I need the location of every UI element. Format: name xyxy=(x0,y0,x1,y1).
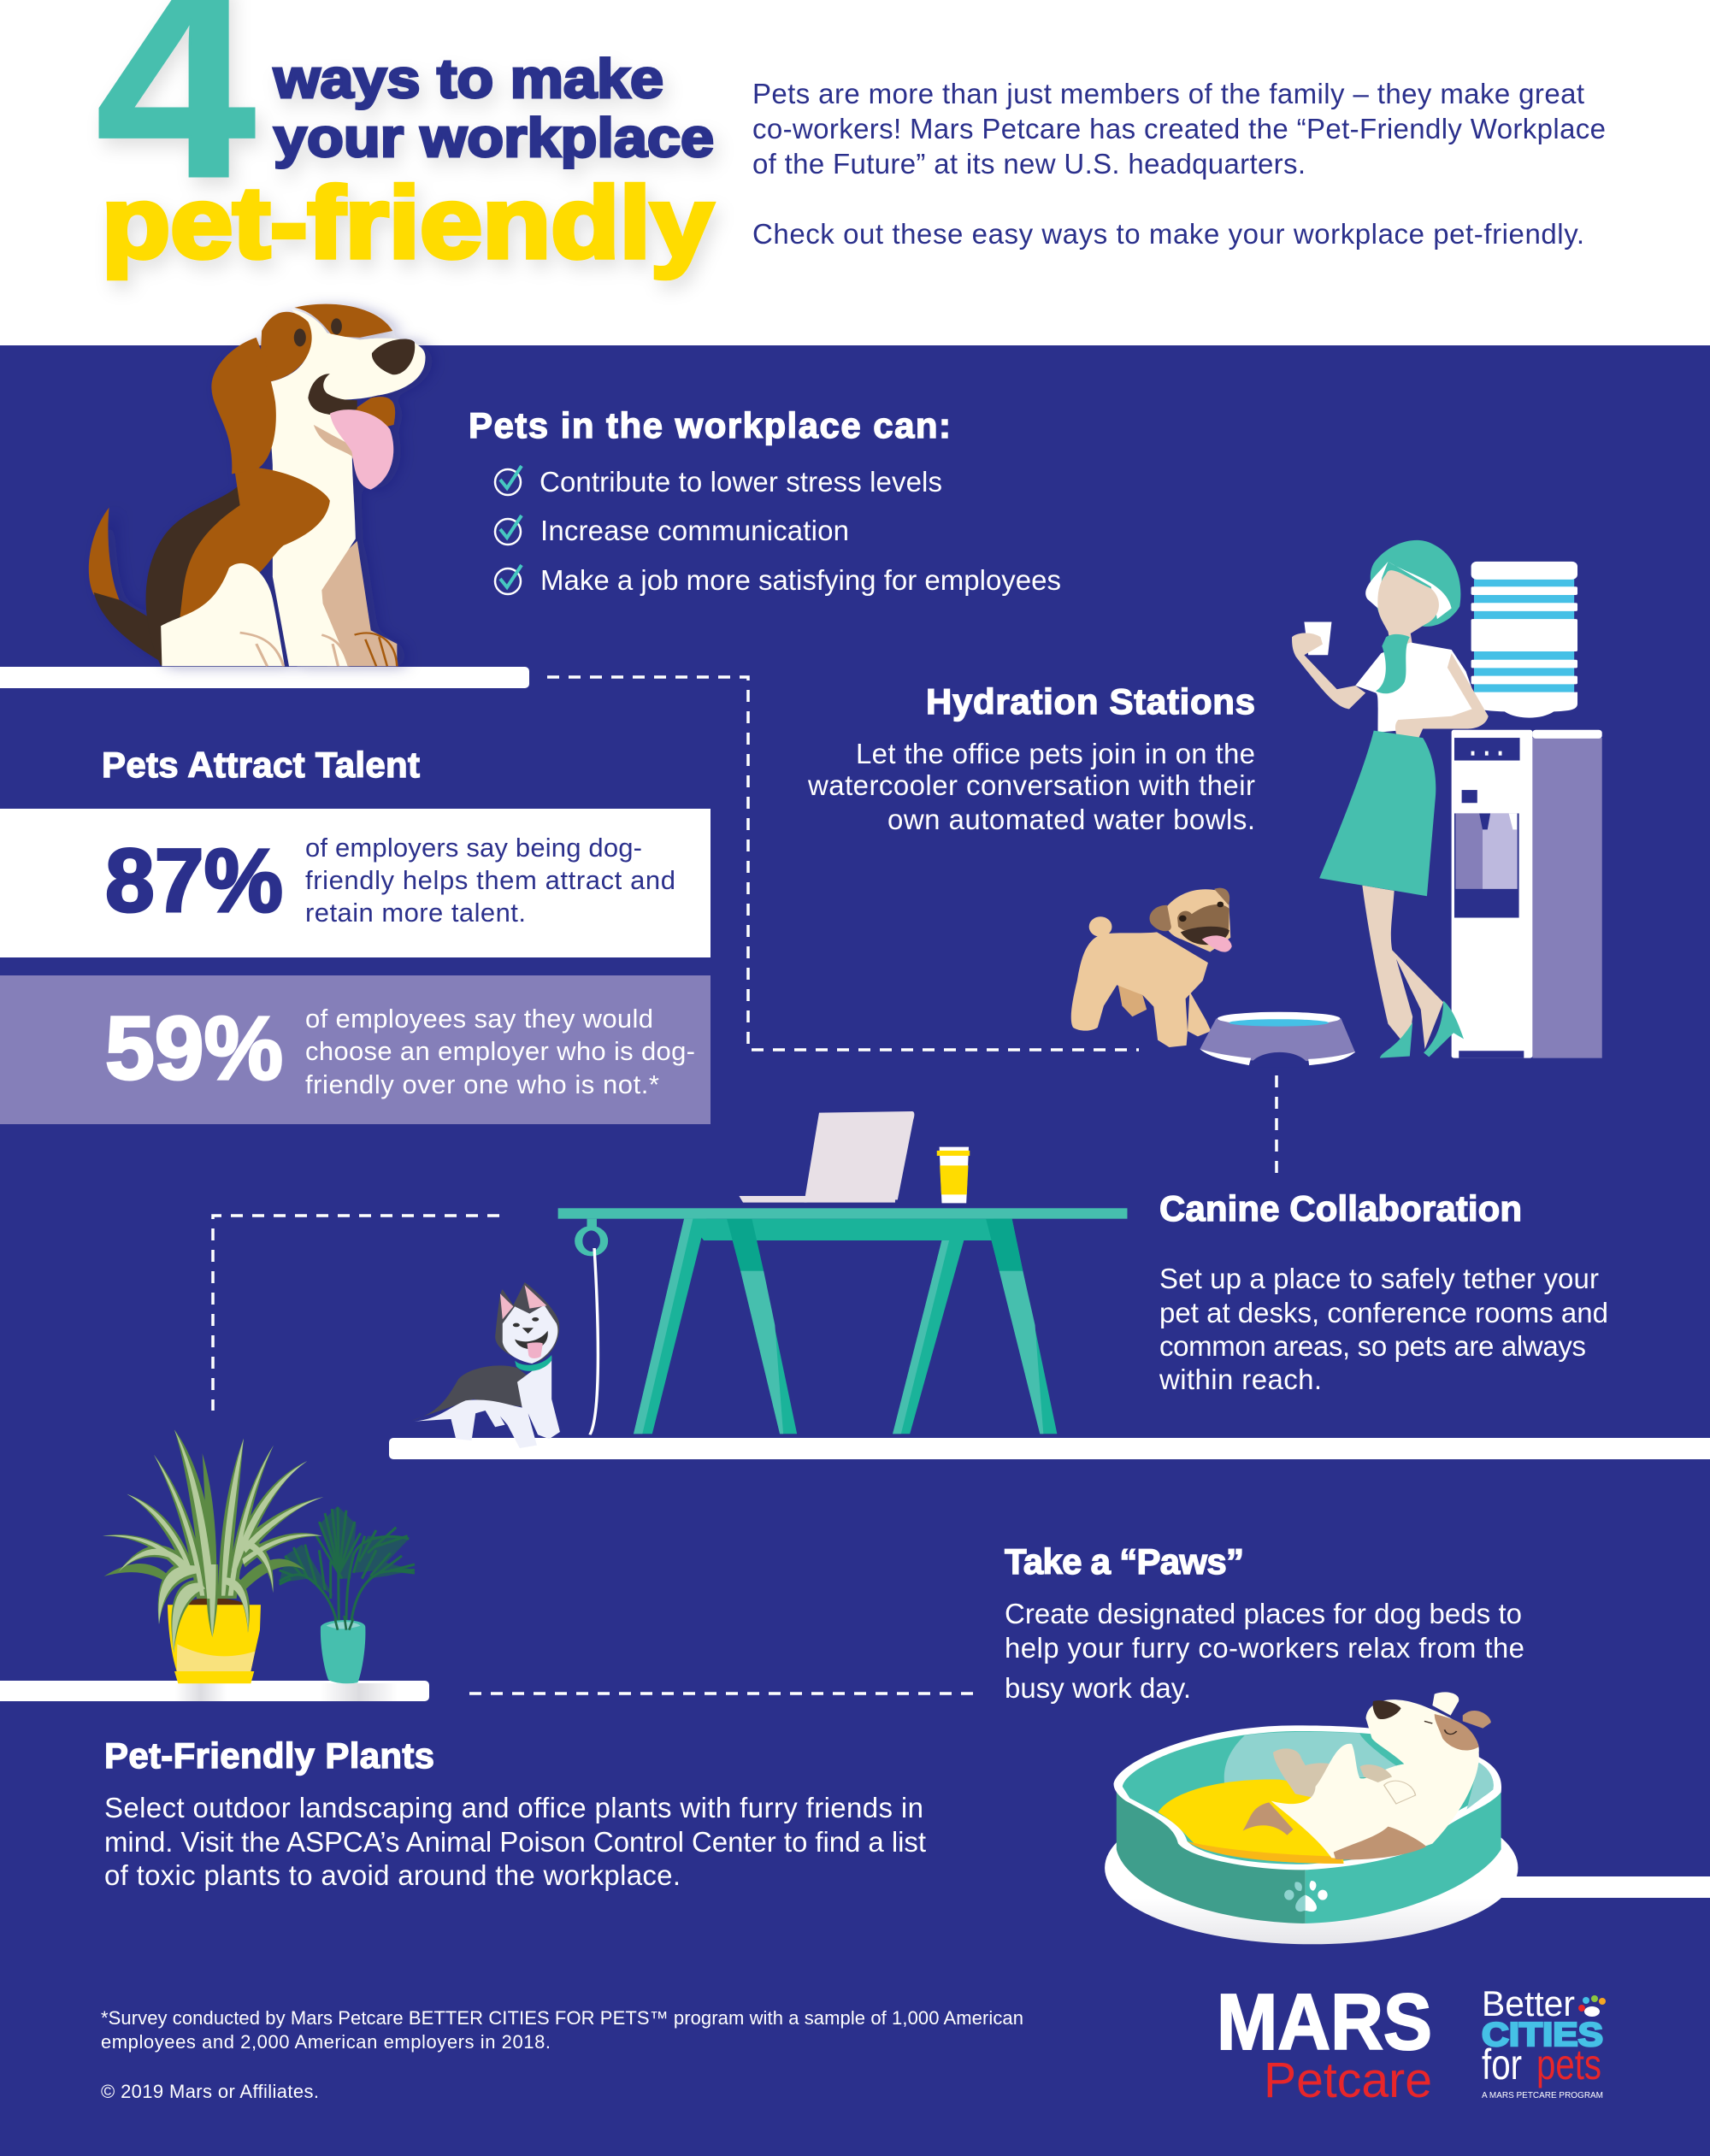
section: take a paws xyxy=(1005,1541,1524,1704)
stat card: 59%: of employees say they would xyxy=(305,1004,653,1034)
illustration: palm in teal vase xyxy=(280,1506,415,1683)
section: take a paws: busy work day. xyxy=(1005,1672,1191,1704)
logo: Better Cities for Pets: pets xyxy=(1536,2041,1601,2088)
leaves inner xyxy=(103,1429,323,1652)
section: canine collaboration: Set up a place to safely tether your xyxy=(1159,1263,1599,1294)
logo: Better Cities for Pets: Better xyxy=(1482,1983,1575,2023)
icon: colored paw xyxy=(1578,1995,1606,2017)
section: pet-friendly plants: of toxic plants to avoid around the workplace. xyxy=(104,1859,681,1891)
section: pet-friendly plants: Pet-Friendly Plants xyxy=(104,1735,434,1776)
stat card: 59%: choose an employer who is dog- xyxy=(305,1036,695,1066)
logo: Mars Petcare xyxy=(1217,1977,1432,2108)
section: canine collaboration: pet at desks, conference rooms and xyxy=(1159,1297,1608,1328)
section: canine collaboration xyxy=(1159,1188,1608,1395)
shelf: plants xyxy=(0,1681,429,1701)
title: pet-friendly xyxy=(102,167,713,280)
logo: Better Cities for Pets: CITIES xyxy=(1482,2017,1603,2053)
section: pet-friendly plants: mind. Visit the ASPCA’s Animal Poison Control Center to find a list xyxy=(104,1826,926,1858)
checklist xyxy=(495,466,1061,596)
section: canine collaboration: common areas, so pets are always xyxy=(1159,1330,1586,1362)
stat card: 87%: retain more talent. xyxy=(305,898,526,928)
stat card: 59%: friendly over one who is not.* xyxy=(305,1069,659,1099)
footnote: employees and 2,000 American employers in 2018. xyxy=(101,2031,551,2053)
logo: Better Cities for Pets: A MARS PETCARE PROGRAM xyxy=(1482,2090,1603,2100)
section: hydration stations: Let the office pets join in on the xyxy=(856,738,1255,769)
intro text: co-workers! Mars Petcare has created the “Pet-Friendly Workplace xyxy=(752,113,1606,144)
footnote: © 2019 Mars or Affiliates. xyxy=(101,2081,319,2102)
section: pet-friendly plants xyxy=(104,1735,926,1891)
illustration: beagle xyxy=(89,304,426,666)
check item 2: Increase communication xyxy=(540,515,849,546)
logo: Mars Petcare: MARS xyxy=(1217,1977,1432,2066)
shelf: desk xyxy=(389,1438,1710,1459)
leaves outer xyxy=(103,1429,323,1652)
illustration: pug xyxy=(1071,888,1232,1047)
illustration: water bowl xyxy=(1200,1012,1355,1067)
section: take a paws: help your furry co-workers relax from the xyxy=(1005,1632,1524,1664)
illustration: dog bed with sleeping dog xyxy=(1105,1692,1518,1944)
section: pet-friendly plants: Select outdoor landscaping and office plants with furry friends in xyxy=(104,1792,923,1823)
title xyxy=(96,0,714,280)
stat card: 59%: 59% xyxy=(105,998,283,1099)
intro text: Pets are more than just members of the family – they make great xyxy=(752,78,1584,109)
footnote: *Survey conducted by Mars Petcare BETTER CITIES FOR PETS™ program with a sample of 1,000 American xyxy=(101,2007,1023,2029)
illustration: husky with leash xyxy=(412,1248,598,1448)
stat card: 87% xyxy=(0,809,711,957)
section: take a paws: Create designated places for dog beds to xyxy=(1005,1598,1522,1629)
section: take a paws: Take a “Paws” xyxy=(1005,1541,1244,1582)
logo: Better Cities for Pets: for xyxy=(1482,2041,1522,2088)
shelf: beagle xyxy=(0,667,529,688)
intro text: Check out these easy ways to make your workplace pet-friendly. xyxy=(752,218,1584,250)
section: hydration stations: Hydration Stations xyxy=(926,681,1255,722)
intro text xyxy=(752,78,1606,250)
stat card: 59% xyxy=(0,975,711,1124)
intro text: of the Future” at its new U.S. headquarters. xyxy=(752,148,1306,180)
section: hydration stations xyxy=(807,681,1255,835)
section: hydration stations: own automated water bowls. xyxy=(887,804,1255,835)
stat card: 87%: of employers say being dog- xyxy=(305,833,642,863)
check item 3: Make a job more satisfying for employees xyxy=(540,564,1061,596)
dashed connectors xyxy=(213,677,1277,1694)
illustration: woman with cup xyxy=(1292,540,1489,1058)
illustration: spider plant in yellow pot xyxy=(103,1429,323,1683)
logo: Mars Petcare: Petcare xyxy=(1264,2053,1432,2108)
check item 1: Contribute to lower stress levels xyxy=(540,466,942,498)
logo: Better Cities for Pets xyxy=(1482,1983,1606,2100)
footnote xyxy=(101,2007,1023,2102)
section: canine collaboration: Canine Collaboration xyxy=(1159,1188,1522,1228)
section: canine collaboration: within reach. xyxy=(1159,1364,1322,1395)
section: pets attract talent: Pets Attract Talent xyxy=(102,745,420,785)
heading: pets in the workplace: Pets in the workplace can: xyxy=(469,405,951,445)
stat card: 87%: 87% xyxy=(105,831,283,931)
illustration: desk with laptop and coffee xyxy=(558,1111,1127,1434)
shelf: dog bed xyxy=(1488,1876,1710,1898)
section: pets attract talent xyxy=(0,745,711,1124)
section: hydration stations: watercooler conversation with their xyxy=(807,769,1255,801)
title: ways to make xyxy=(273,48,663,109)
title: your workplace xyxy=(274,107,714,168)
stat card: 87%: friendly helps them attract and xyxy=(305,865,675,895)
illustration: water cooler xyxy=(1452,562,1602,1058)
